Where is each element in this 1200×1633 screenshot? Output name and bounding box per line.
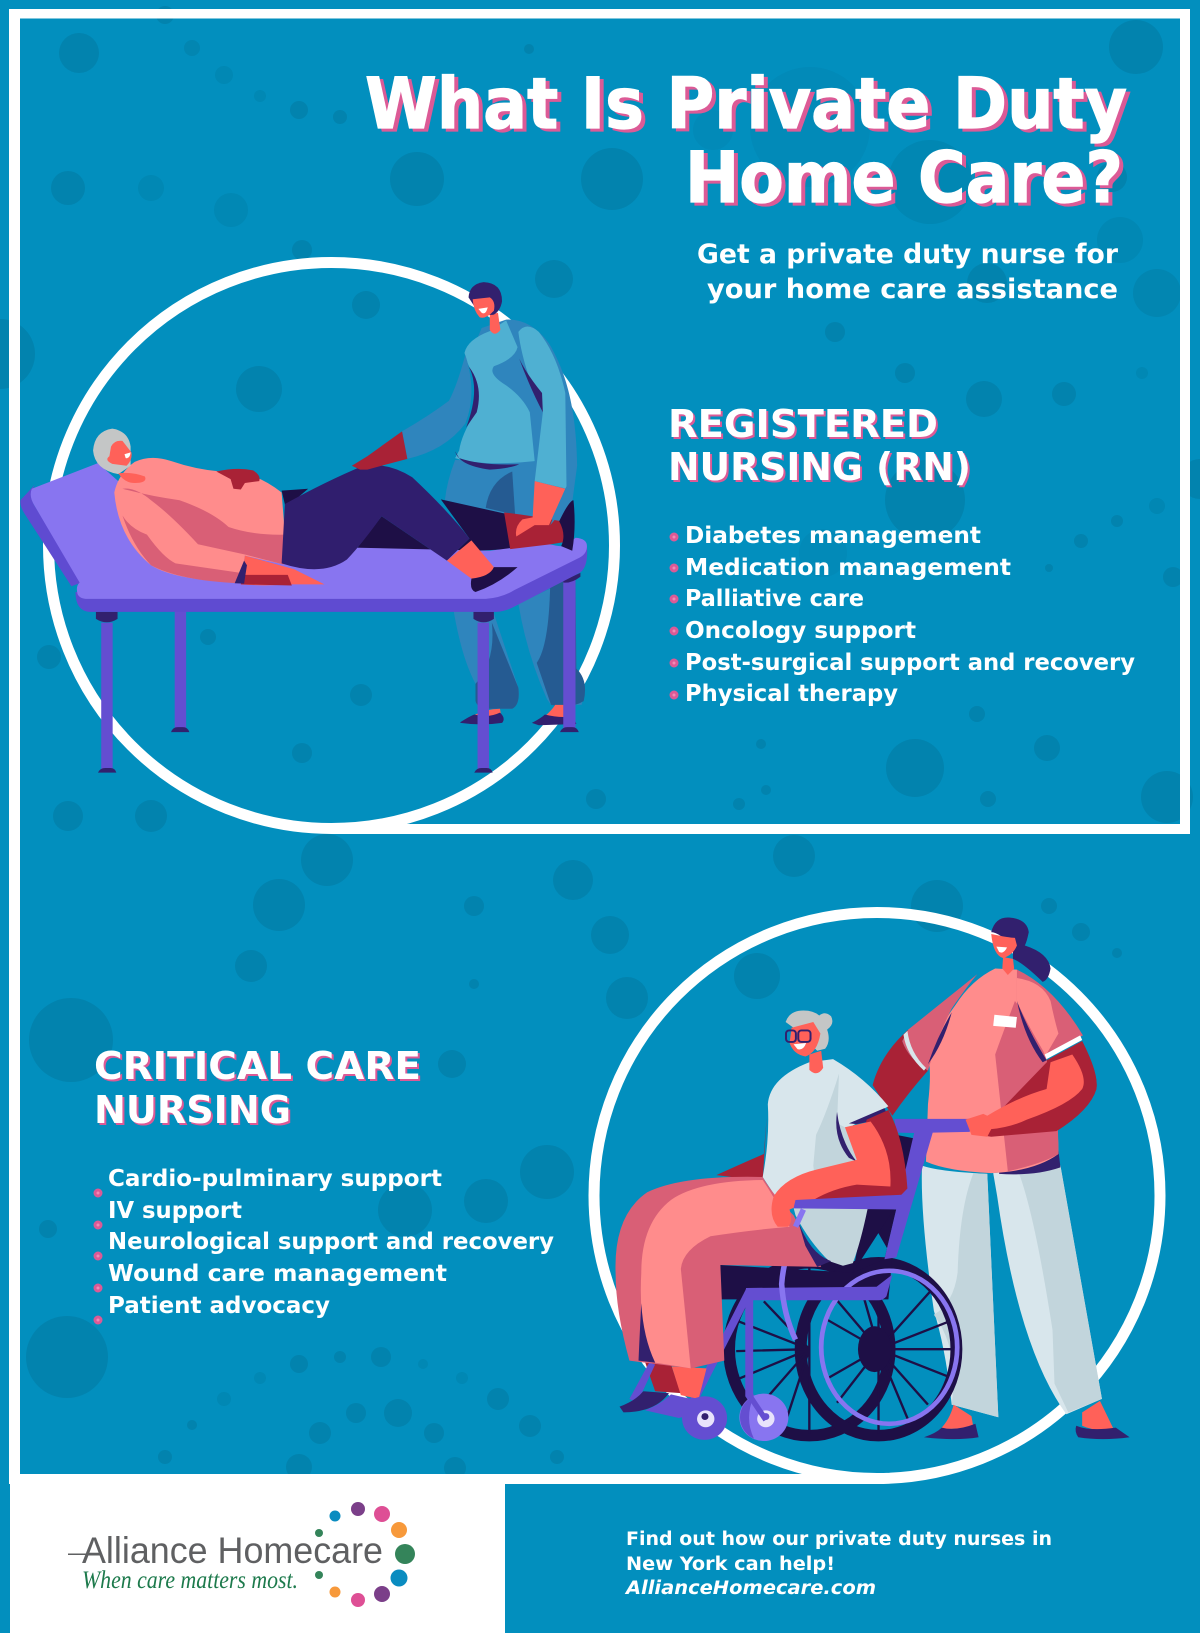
list: registered nursing services: Medication management: [685, 555, 1011, 581]
heading: registered nursing: REGISTERED: [668, 402, 938, 446]
footer call to action: New York can help!: [626, 1554, 835, 1575]
wheelchair casters: [682, 1394, 788, 1441]
heading: registered nursing: [668, 402, 973, 491]
title line 1: What Is Private Duty: [369, 66, 1131, 148]
list: registered nursing services: Palliative care: [685, 586, 864, 612]
circle: top illustration ring: [48, 262, 614, 828]
subtitle: Get a private duty nurse for: [697, 239, 1119, 270]
title: [365, 63, 1131, 222]
exam table: [20, 463, 587, 773]
list: registered nursing services: Post-surgical support and recovery: [685, 650, 1135, 676]
footer call to action: AllianceHomecare.com: [624, 1578, 876, 1599]
title line 2: Home Care?: [685, 137, 1123, 219]
list: registered nursing services: Diabetes management: [685, 523, 981, 549]
list: critical care services: Cardio-pulminary support: [108, 1166, 442, 1192]
nurse's forearm and hand on the handle: [966, 1041, 1097, 1137]
list: critical care services: [95, 1166, 554, 1323]
seated senior patient: [615, 1011, 912, 1418]
heading: critical care nursing: NURSING: [94, 1088, 291, 1132]
footer panel: logo background: [10, 1474, 505, 1633]
circle: bottom illustration ring: [594, 912, 1160, 1478]
list: critical care services: Neurological support and recovery: [108, 1229, 554, 1255]
list: critical care services: Patient advocacy: [108, 1293, 330, 1319]
illustration: nurse pushing a senior in a wheelchair: [615, 918, 1130, 1441]
subtitle: your home care assistance: [707, 274, 1118, 305]
list: critical care services: Wound care management: [108, 1261, 447, 1287]
list: critical care services: IV support: [108, 1198, 242, 1224]
heading: registered nursing: NURSING (RN): [670, 447, 973, 491]
list: registered nursing services: [671, 523, 1135, 707]
subtitle: [697, 239, 1119, 305]
heading: registered nursing: REGISTERED: [670, 404, 940, 448]
title line 1: What Is Private Duty: [365, 63, 1127, 145]
patient figure: [93, 429, 576, 592]
logo: Alliance Homecare: When care matters most.: [82, 1567, 298, 1594]
logo: Alliance Homecare: Alliance Homecare: [82, 1530, 383, 1571]
illustration: nurse helping a patient on an exam table: [20, 282, 587, 773]
heading: critical care nursing: CRITICAL CARE: [94, 1044, 421, 1088]
footer call to action: [624, 1529, 1052, 1599]
list: registered nursing services: Physical therapy: [685, 681, 898, 707]
wheelchair rear wheels and frame: [687, 1119, 972, 1436]
heading: critical care nursing: [94, 1044, 423, 1134]
nurse figure: [402, 282, 585, 725]
footer call to action: Find out how our private duty nurses in: [626, 1529, 1052, 1550]
title line 2: Home Care?: [689, 140, 1127, 222]
patient's far leg: [282, 489, 510, 561]
nurse figure: [873, 918, 1130, 1439]
heading: registered nursing: NURSING (RN): [668, 445, 971, 489]
heading: critical care nursing: CRITICAL CARE: [96, 1046, 423, 1090]
heading: critical care nursing: NURSING: [96, 1090, 293, 1134]
list: registered nursing services: Oncology support: [685, 618, 916, 644]
logo: Alliance Homecare: [68, 1502, 415, 1607]
